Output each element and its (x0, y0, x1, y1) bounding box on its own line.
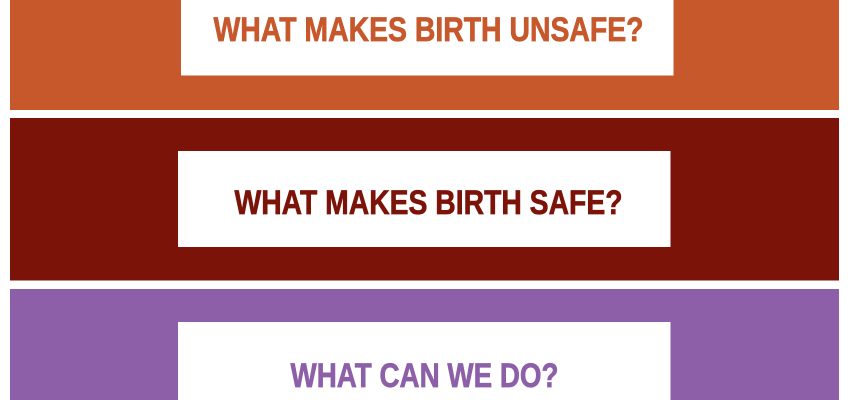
heading box: safe (178, 151, 670, 247)
panel: what can we do (10, 289, 839, 400)
panel: what makes birth safe (10, 118, 839, 280)
heading: what can we do: WHAT CAN WE DO? (290, 357, 558, 395)
heading box: what can we do (178, 322, 670, 400)
heading: what makes birth safe: WHAT MAKES BIRTH SAFE? (234, 184, 622, 222)
panel: what makes birth unsafe (10, 0, 839, 110)
heading box: unsafe (181, 0, 674, 76)
heading: what makes birth unsafe: WHAT MAKES BIRTH UNSAFE? (214, 11, 644, 49)
